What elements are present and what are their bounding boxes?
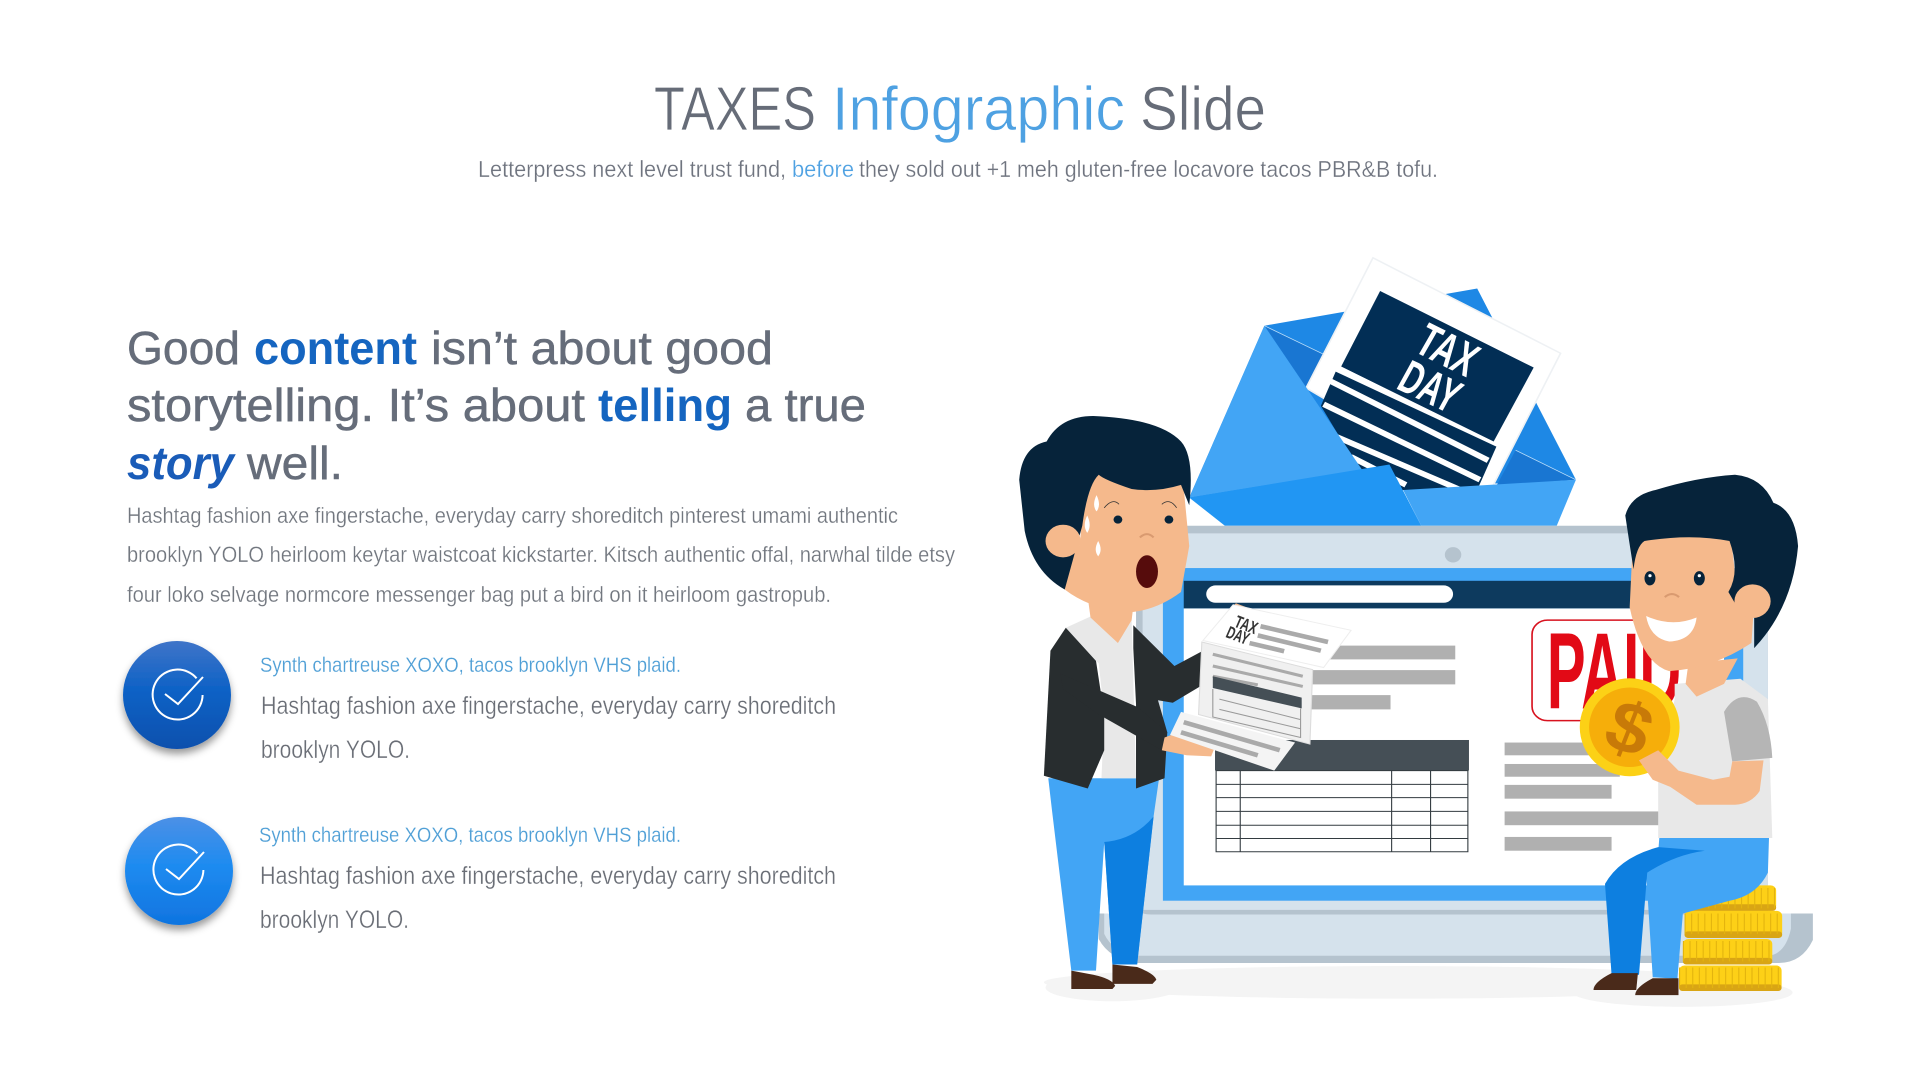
title <box>654 75 1266 144</box>
subtitle: they sold out +1 meh gluten-free locavore tacos PBR&B tofu. <box>859 156 1438 182</box>
item 1 heading: Synth chartreuse XOXO, tacos brooklyn VHS plaid. <box>260 653 681 677</box>
tax day letter: TAX <box>1407 314 1488 387</box>
paid stamp: PAID <box>1547 610 1681 731</box>
title: Slide <box>1140 75 1266 144</box>
trousers <box>1605 838 1769 979</box>
papers in hand <box>1170 605 1351 771</box>
gold coin: $ <box>1595 684 1664 772</box>
headline: well. <box>246 437 343 489</box>
list item 1 <box>123 641 836 764</box>
list item 2 <box>125 817 836 934</box>
document left lines <box>1310 646 1455 709</box>
subtitle <box>478 156 1438 182</box>
face <box>1063 459 1189 612</box>
body paragraph: Hashtag fashion axe fingerstache, everyday carry shoreditch pinterest umami authentic <box>127 503 898 528</box>
lower sheet <box>1170 712 1295 771</box>
document table <box>1215 740 1469 852</box>
item 2 text: brooklyn YOLO. <box>260 906 409 934</box>
ground shadows <box>1044 966 1793 1007</box>
jacket <box>1044 625 1203 788</box>
laptop screen <box>1136 526 1768 914</box>
left person: worried man <box>1019 416 1247 989</box>
shoes <box>1071 964 1156 989</box>
face <box>1630 526 1754 671</box>
shirt <box>1066 617 1136 778</box>
body paragraph: four loko selvage normcore messenger bag put a bird on it heirloom gastropub. <box>127 582 831 607</box>
top sheet <box>1203 605 1351 668</box>
headline: isn’t about good <box>431 322 773 374</box>
body paragraph: brooklyn YOLO heirloom keytar waistcoat kickstarter. Kitsch authentic offal, narwhal tilde etsy <box>127 542 955 567</box>
icon: check badge bright blue <box>125 817 233 925</box>
item 1 text: brooklyn YOLO. <box>261 736 410 764</box>
papers in hand: TAX <box>1232 612 1261 638</box>
middle sheet <box>1199 642 1313 744</box>
right person: smiling man <box>1580 475 1798 995</box>
neck <box>1088 597 1134 643</box>
icon: check badge dark blue <box>123 641 231 749</box>
title: Infographic <box>832 75 1125 144</box>
paid stamp <box>1532 610 1691 731</box>
laptop base <box>1099 913 1813 963</box>
item 2 text <box>260 862 836 934</box>
shoes <box>1593 973 1678 995</box>
neck <box>1686 658 1738 697</box>
item 1 text <box>261 692 836 764</box>
envelope front flaps <box>1189 326 1576 526</box>
sleeve <box>1724 697 1772 761</box>
hair <box>1019 416 1191 589</box>
headline: telling <box>598 379 732 431</box>
headline: storytelling. It’s about <box>127 379 585 431</box>
headline <box>127 322 866 489</box>
shirt <box>1658 679 1772 838</box>
headline: a true <box>745 379 866 431</box>
envelope back <box>1189 288 1576 498</box>
hands <box>1162 603 1247 756</box>
headline: content <box>254 322 417 374</box>
document right lines <box>1505 743 1664 851</box>
body paragraph <box>127 503 955 607</box>
ear <box>1046 525 1081 557</box>
coin stack <box>1679 885 1782 991</box>
trousers <box>1048 778 1159 971</box>
item 2 text: Hashtag fashion axe fingerstache, everyday carry shoreditch <box>260 862 836 890</box>
item 1 text: Hashtag fashion axe fingerstache, everyday carry shoreditch <box>261 692 836 720</box>
item 2 heading: Synth chartreuse XOXO, tacos brooklyn VHS plaid. <box>259 823 681 847</box>
papers in hand: DAY <box>1223 623 1252 649</box>
gold coin <box>1580 678 1680 776</box>
illustration: tax day scene <box>1019 258 1813 1007</box>
ear <box>1734 584 1771 618</box>
title: TAXES <box>654 75 816 144</box>
hair <box>1625 475 1798 648</box>
headline: story <box>127 437 236 489</box>
subtitle: Letterpress next level trust fund, <box>478 156 786 182</box>
tax day letter <box>1306 258 1561 495</box>
tax day letter: DAY <box>1390 351 1470 423</box>
arm <box>1639 750 1764 805</box>
headline: Good <box>127 322 240 374</box>
subtitle: before <box>792 156 854 182</box>
